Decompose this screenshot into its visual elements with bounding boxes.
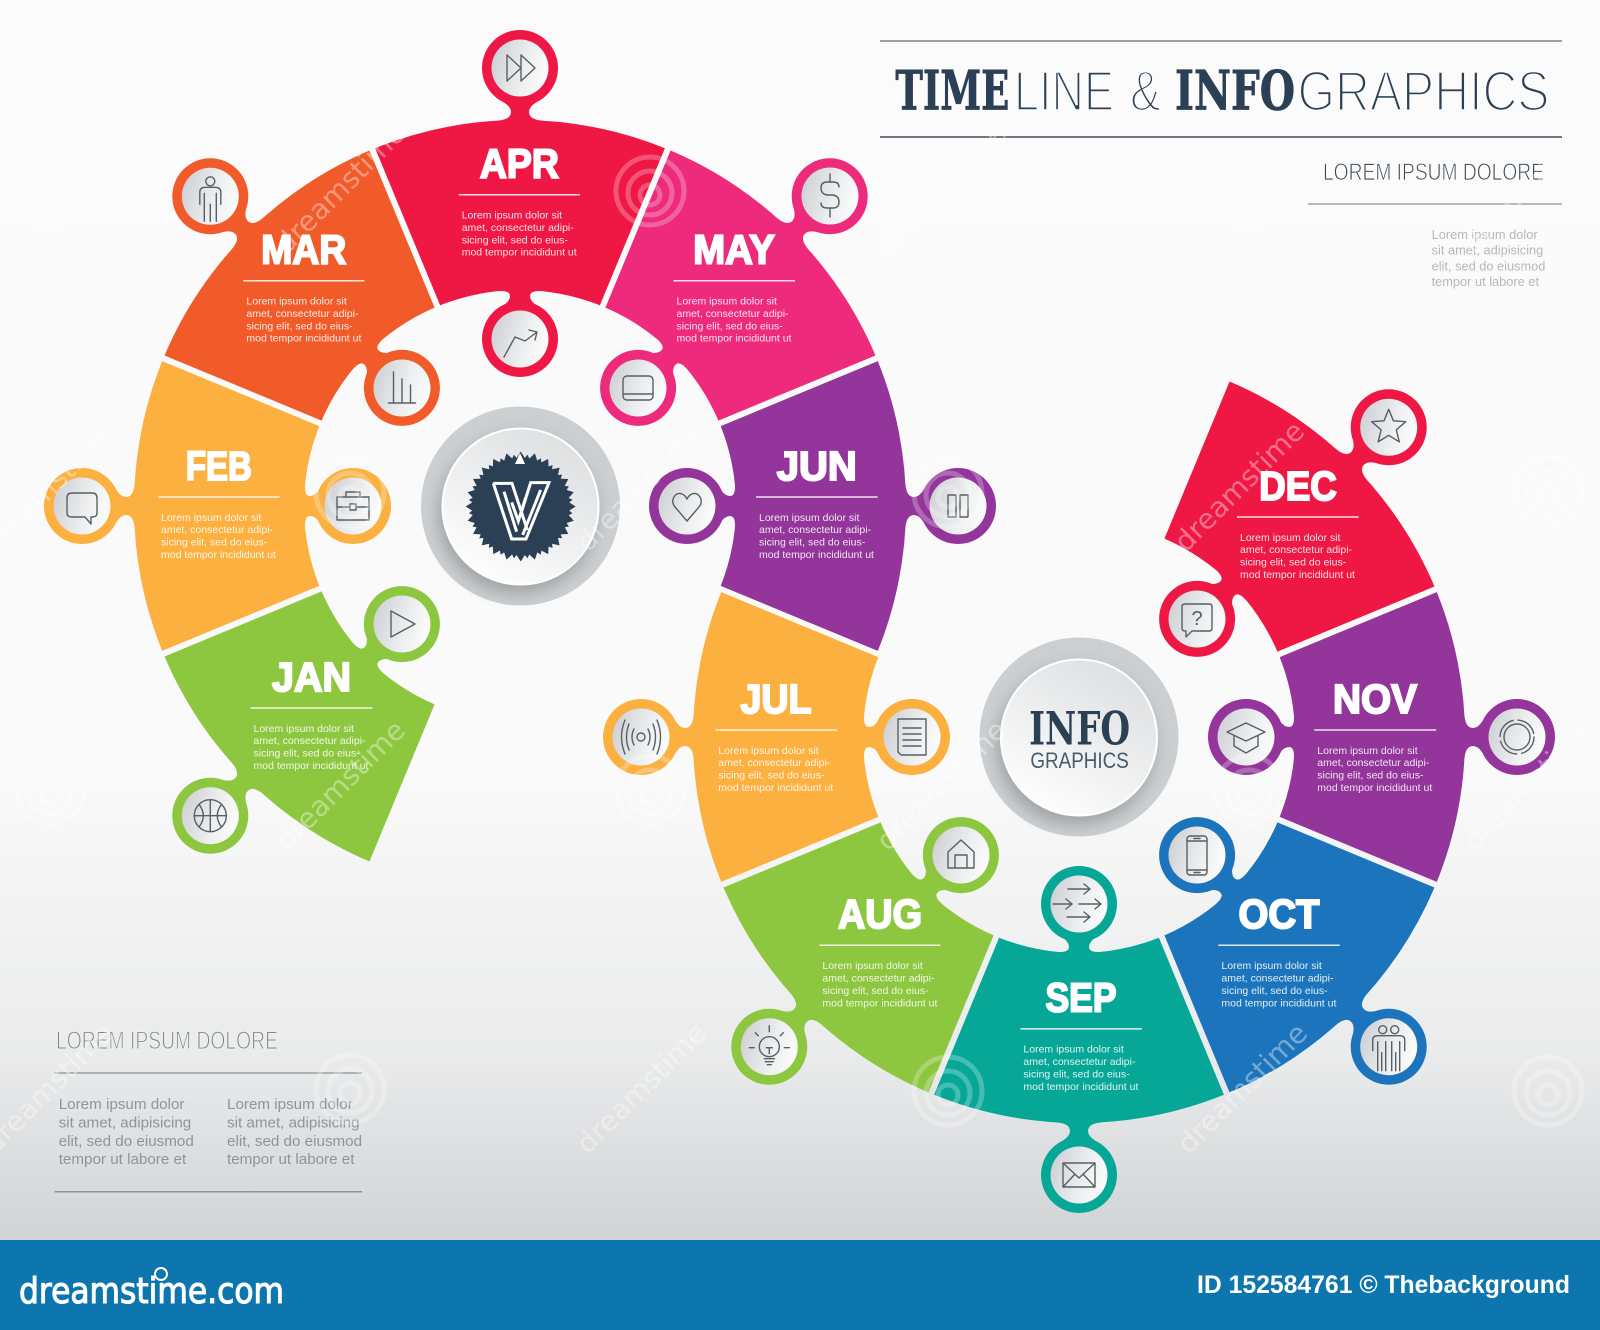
month segment: MAR xyxy=(81,67,531,517)
segment shape: MAY xyxy=(509,67,959,517)
text block: JAN: sicing elit, sed do eius- xyxy=(254,748,360,760)
icon: question bubble: ? xyxy=(1191,608,1203,630)
text block: JAN: amet, consectetur adipi- xyxy=(254,735,366,747)
text block: OCT: Lorem ipsum dolor sit xyxy=(1221,960,1322,972)
heading: NOV: NOV xyxy=(1333,676,1417,722)
text block: APR: sicing elit, sed do eius- xyxy=(462,234,568,246)
title block xyxy=(880,41,1562,137)
watermark overlay: dreamstime xyxy=(870,117,1013,260)
icon: trend arrow xyxy=(492,310,548,368)
watermark overlay: dreamstime xyxy=(1171,1017,1314,1160)
text block: NOV: amet, consectetur adipi- xyxy=(1317,757,1430,769)
icon: V logo burst xyxy=(462,448,579,565)
text block: JUN: Lorem ipsum dolor sit xyxy=(759,512,859,524)
watermark overlay: dreamstime xyxy=(269,117,412,260)
heading: DEC: DEC xyxy=(1259,463,1337,509)
text block: MAR: sicing elit, sed do eius- xyxy=(246,320,353,332)
icon: heart xyxy=(658,478,716,534)
watermark overlay: dreamstime xyxy=(870,714,1013,857)
badge text: GRAPHICS: GRAPHICS xyxy=(1030,748,1129,773)
text block: APR: mod tempor incididunt ut xyxy=(462,247,577,259)
icon: card xyxy=(610,360,666,416)
heading: SEP: SEP xyxy=(1046,975,1116,1021)
text block: top right: elit, sed do eiusmod xyxy=(1432,258,1545,273)
segment shape: SEP xyxy=(934,866,1224,1213)
text block: JUL: Lorem ipsum dolor sit xyxy=(718,745,819,757)
text block: JUL: amet, consectetur adipi- xyxy=(718,757,831,769)
icon: document xyxy=(884,708,940,766)
text block: FEB: mod tempor incididunt ut xyxy=(161,549,276,561)
text block: APR: Lorem ipsum dolor sit xyxy=(462,210,562,222)
icon: play xyxy=(374,596,430,652)
text block: MAY: amet, consectetur adipi- xyxy=(676,308,789,320)
month segment: MAY xyxy=(509,67,959,517)
watermark overlay: dreamstime xyxy=(1168,415,1311,558)
title: ampersand: & xyxy=(1130,60,1161,124)
text block: JUN: sicing elit, sed do eius- xyxy=(759,537,866,549)
icon: light bulb xyxy=(741,1018,798,1075)
center badge: INFO GRAPHICS xyxy=(980,638,1178,836)
text block: top right: Lorem ipsum dolor xyxy=(1432,227,1538,242)
text block: JAN: Lorem ipsum dolor sit xyxy=(254,723,354,735)
month segment: DEC xyxy=(1068,298,1518,748)
segment shape: DEC xyxy=(1068,298,1518,748)
segment shape: JAN xyxy=(81,495,531,945)
text block: NOV: sicing elit, sed do eius- xyxy=(1317,770,1424,782)
icon: fast forward xyxy=(492,40,548,96)
heading: AUG: AUG xyxy=(838,891,922,937)
heading: JAN: JAN xyxy=(272,654,351,700)
text block: NOV: Lorem ipsum dolor sit xyxy=(1317,745,1418,757)
segment shape: APR xyxy=(375,30,665,377)
text block: DEC: Lorem ipsum dolor sit xyxy=(1240,532,1340,544)
heading: MAR: MAR xyxy=(261,226,346,272)
text block: APR: amet, consectetur adipi- xyxy=(462,222,574,234)
badge text: INFO: INFO xyxy=(1029,701,1130,755)
icon: basketball xyxy=(182,787,239,844)
footer bar xyxy=(0,1240,1600,1330)
text block: column 1: sit amet, adipisicing xyxy=(59,1114,191,1131)
footer logo: dreamstime.com: dreamstime.com xyxy=(19,1271,284,1312)
month segment: APR xyxy=(375,30,665,377)
text block: AUG: mod tempor incididunt ut xyxy=(822,997,937,1009)
text block: SEP: Lorem ipsum dolor sit xyxy=(1023,1044,1124,1056)
text block: FEB: amet, consectetur adipi- xyxy=(161,524,274,536)
text block: AUG: amet, consectetur adipi- xyxy=(822,972,935,984)
segment shape: AUG xyxy=(640,726,1090,1176)
icon: two people xyxy=(1360,1018,1417,1075)
watermark overlay: dreamstime xyxy=(570,1017,713,1160)
heading: OCT: OCT xyxy=(1238,891,1320,937)
segment shape: MAR xyxy=(81,67,531,517)
text block: column 2: sit amet, adipisicing xyxy=(227,1114,360,1131)
text block: column 1: tempor ut labore et xyxy=(59,1151,187,1168)
heading: FEB: FEB xyxy=(186,443,252,489)
text block: top right: sit amet, adipisicing xyxy=(1432,243,1543,258)
segment shape: JUN xyxy=(649,361,996,651)
heading: JUN: JUN xyxy=(777,443,857,489)
heading: MAY: MAY xyxy=(693,226,775,272)
text block: JAN: mod tempor incididunt ut xyxy=(254,760,369,772)
segment shape: FEB xyxy=(44,361,391,651)
text block: JUN: amet, consectetur adipi- xyxy=(759,524,872,536)
title: TIME: TIME xyxy=(895,58,1009,122)
center badge: logo xyxy=(421,406,620,606)
text block: column 1: Lorem ipsum dolor xyxy=(59,1096,184,1113)
month segment: JUN xyxy=(649,361,996,651)
icon: pause xyxy=(930,478,986,534)
icon: speech bubble xyxy=(54,478,110,534)
text block: JUN: mod tempor incididunt ut xyxy=(759,549,874,561)
month segment: NOV xyxy=(1208,592,1555,882)
segment shape: OCT xyxy=(1068,726,1518,1176)
month segment: AUG xyxy=(640,726,1090,1176)
text block: OCT: amet, consectetur adipi- xyxy=(1221,972,1334,984)
heading: APR: APR xyxy=(480,140,559,186)
text block: MAR: amet, consectetur adipi- xyxy=(246,308,359,320)
watermark overlay: dreamstime xyxy=(1457,714,1600,857)
text block: JUL: mod tempor incididunt ut xyxy=(718,782,833,794)
icon: crossing arrows xyxy=(1050,876,1108,932)
segment shape: JUL xyxy=(603,592,950,882)
subheading: bottom left: LOREM IPSUM DOLORE xyxy=(56,1027,278,1055)
icon: envelope xyxy=(1050,1146,1108,1204)
segment shape: NOV xyxy=(1208,592,1555,882)
title: GRAPHICS: GRAPHICS xyxy=(1298,60,1550,124)
text block: NOV: mod tempor incididunt ut xyxy=(1317,782,1432,794)
icon: rings xyxy=(1488,708,1546,766)
watermark overlay: dreamstime xyxy=(1457,117,1600,260)
text block: MAY: sicing elit, sed do eius- xyxy=(676,320,783,332)
text block: MAY: mod tempor incididunt ut xyxy=(676,333,792,345)
text block: FEB: Lorem ipsum dolor sit xyxy=(161,512,261,524)
panel: bottom left notes xyxy=(55,1027,362,1192)
text block: DEC: sicing elit, sed do eius- xyxy=(1240,557,1347,569)
title: LINE: LINE xyxy=(1014,60,1114,124)
text block: MAR: mod tempor incididunt ut xyxy=(246,333,361,345)
text block: column 2: Lorem ipsum dolor xyxy=(227,1096,353,1113)
text block: top right: tempor ut labore et xyxy=(1432,274,1539,289)
text block: SEP: sicing elit, sed do eius- xyxy=(1023,1068,1130,1080)
icon: signal xyxy=(612,708,670,766)
icon: bar chart xyxy=(374,360,430,416)
heading: JUL: JUL xyxy=(740,676,812,722)
title: INFO: INFO xyxy=(1175,58,1295,122)
icon: briefcase xyxy=(324,478,382,534)
text block: FEB: sicing elit, sed do eius- xyxy=(161,537,268,549)
text block: AUG: sicing elit, sed do eius- xyxy=(822,985,929,997)
text block: OCT: sicing elit, sed do eius- xyxy=(1221,985,1328,997)
text block: SEP: amet, consectetur adipi- xyxy=(1023,1056,1136,1068)
icon: graduation cap xyxy=(1218,708,1274,766)
subheading: top right: LOREM IPSUM DOLORE xyxy=(1323,159,1544,186)
month segment: SEP xyxy=(934,866,1224,1213)
text block: MAY: Lorem ipsum dolor sit xyxy=(676,296,777,308)
text block: JUL: sicing elit, sed do eius- xyxy=(718,770,825,782)
icon: footer spiral xyxy=(155,1268,167,1280)
icon: question bubble xyxy=(1168,590,1226,648)
icon: person xyxy=(182,168,239,225)
icon: phone xyxy=(1168,826,1226,884)
text block: DEC: mod tempor incididunt ut xyxy=(1240,569,1355,581)
watermark overlay: dreamstime xyxy=(570,415,713,558)
footer credit: ID 152584761 © Thebackground xyxy=(1197,1271,1570,1299)
month segment: JAN xyxy=(81,495,531,945)
text block: SEP: mod tempor incididunt ut xyxy=(1023,1081,1138,1093)
month segment: JUL xyxy=(603,592,950,882)
text block: DEC: amet, consectetur adipi- xyxy=(1240,544,1353,556)
icon: dollar xyxy=(802,168,858,224)
text block: MAR: Lorem ipsum dolor sit xyxy=(246,296,347,308)
icon: star xyxy=(1360,399,1417,456)
text block: column 1: elit, sed do eiusmod xyxy=(59,1133,194,1150)
icon: house xyxy=(932,826,990,884)
month segment: OCT xyxy=(1068,726,1518,1176)
text block: OCT: mod tempor incididunt ut xyxy=(1221,997,1336,1009)
month segment: FEB xyxy=(44,361,391,651)
text block: column 2: tempor ut labore et xyxy=(227,1151,355,1168)
text block: AUG: Lorem ipsum dolor sit xyxy=(822,960,923,972)
watermark overlay xyxy=(0,117,1600,1160)
text block: column 2: elit, sed do eiusmod xyxy=(227,1133,362,1150)
watermark overlay: dreamstime xyxy=(269,714,412,857)
